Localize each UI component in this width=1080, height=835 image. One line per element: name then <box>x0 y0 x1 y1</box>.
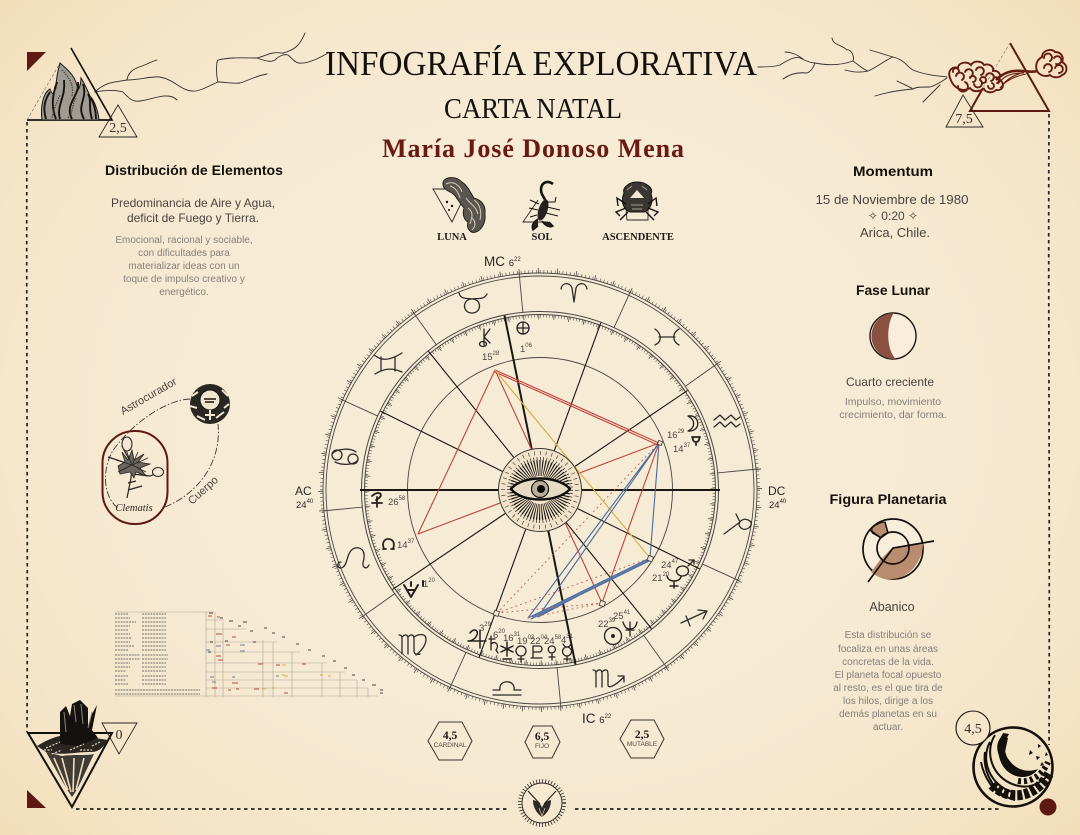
earth element icon <box>27 700 137 808</box>
neptune degree: 25 <box>613 611 624 622</box>
description: materializar ideas con un <box>128 261 240 272</box>
mars degree: 24 <box>661 560 672 571</box>
angle labels <box>295 254 787 726</box>
phase description: crecimiento, dar forma. <box>839 409 947 421</box>
mercury <box>562 644 572 661</box>
jupiter degree: 3 <box>479 623 484 634</box>
figure description: los hilos, dirige a los <box>843 696 933 707</box>
capricorn <box>724 514 751 534</box>
saturn degree: 6 <box>493 630 498 641</box>
cloud right <box>1036 50 1066 77</box>
saturn <box>489 636 498 653</box>
dc: DC <box>768 484 786 498</box>
leo <box>338 548 369 568</box>
figure description: actuar. <box>873 722 903 733</box>
mutable <box>620 720 664 758</box>
house cusps <box>360 316 720 664</box>
figure description: focaliza en unas áreas <box>838 644 938 655</box>
mc: MC 6 <box>484 254 514 269</box>
panel: figura planetaria <box>830 492 947 733</box>
mars degree: 47 <box>672 559 679 565</box>
moon degree: 16 <box>667 430 678 441</box>
panel: distribucion de elementos <box>105 163 283 298</box>
panel: fase lunar <box>839 283 947 421</box>
chiron <box>480 329 490 346</box>
vertex degree: 20 <box>428 578 436 584</box>
wheel rings and ticks <box>300 250 780 730</box>
fortune <box>517 322 529 334</box>
cardinal: CARDINAL <box>434 742 467 749</box>
subtitle: CARTA NATAL <box>444 94 622 125</box>
mercury degree: 4 <box>561 635 566 646</box>
cloud left <box>949 62 1003 92</box>
ascendente sign <box>602 182 674 243</box>
summary: deficit de Fuego y Tierra. <box>127 211 259 225</box>
fijo <box>525 726 560 758</box>
figure description: Esta distribución se <box>845 630 932 641</box>
sagittarius <box>681 610 707 626</box>
ac: AC <box>295 484 312 498</box>
heading: Fase Lunar <box>856 283 931 298</box>
clematis frame <box>102 431 168 524</box>
sol sign <box>523 182 560 243</box>
moon degree: 29 <box>678 429 685 435</box>
pluto degree: 58 <box>399 496 406 502</box>
uranus <box>692 437 700 445</box>
dc: 40 <box>780 499 787 505</box>
natal chart wheel <box>295 250 787 730</box>
jupiter degree: 29 <box>484 622 492 628</box>
cancer <box>332 449 358 464</box>
chiron degree: 15 <box>482 352 493 363</box>
pluto <box>372 493 382 507</box>
person name: María José Donoso Mena <box>382 134 684 163</box>
astrocurador diagram <box>102 376 230 524</box>
node degree: 37 <box>408 539 415 545</box>
birth data: Arica, Chile. <box>860 225 930 240</box>
mars <box>676 560 694 576</box>
sextile planet <box>667 576 681 588</box>
node <box>383 539 394 549</box>
birth data: 15 de Noviembre de 1980 <box>816 192 968 207</box>
ic: 22 <box>605 714 612 720</box>
uranus degree: 37 <box>684 443 691 449</box>
figure description: El planeta focal opuesto <box>835 670 942 681</box>
venus degree: 19 <box>517 636 528 647</box>
sign dividers <box>322 272 758 708</box>
dashed orbit <box>105 399 218 508</box>
phase description <box>839 396 947 421</box>
eye <box>511 478 570 500</box>
figure description <box>833 630 943 733</box>
label astrocurador: Astrocurador <box>118 376 179 418</box>
saturn degree: 20 <box>498 629 506 635</box>
chiron degree: 28 <box>493 351 500 357</box>
aspect table <box>115 612 383 697</box>
ic: IC 6 <box>582 711 605 726</box>
fire element icon <box>27 48 137 137</box>
pluto p <box>531 646 542 658</box>
description: con dificultades para <box>138 248 230 259</box>
description: energético. <box>159 287 209 298</box>
heading: Momentum <box>853 164 933 179</box>
mc: 22 <box>514 257 521 263</box>
figure description: al resto, es el que tira de <box>833 683 943 694</box>
ceres degree: 31 <box>514 632 521 638</box>
aspect marks <box>206 613 383 693</box>
pisces <box>655 329 679 345</box>
title: INFOGRAFÍA EXPLORATIVA <box>325 44 758 83</box>
taurus <box>459 293 487 313</box>
neptune <box>623 622 637 636</box>
ceres <box>501 642 513 659</box>
ceres degree: 16 <box>503 633 514 644</box>
icon group: luna sol ascendente <box>433 178 674 243</box>
vertex <box>404 581 423 597</box>
vertex degree: 1 <box>423 579 428 590</box>
modality hexagons <box>428 720 664 760</box>
phase name: Cuarto creciente <box>846 375 934 389</box>
fire score: 2,5 <box>109 121 127 136</box>
description: Emocional, racional y sociable, <box>115 235 253 246</box>
description: toque de impulso creativo y <box>123 274 245 285</box>
dc <box>768 484 787 511</box>
birth data: ✧ 0:20 ✧ <box>868 209 918 223</box>
fortune degree: 06 <box>525 343 533 349</box>
description <box>115 235 253 298</box>
label cuerpo: Cuerpo <box>186 474 221 507</box>
fijo: 6,5 <box>535 731 549 743</box>
mutable: 2,5 <box>635 729 649 741</box>
pluto p degree: 04 <box>541 635 548 641</box>
ascendente sign: ASCENDENTE <box>602 232 674 243</box>
fortune degree: 1 <box>520 344 525 355</box>
grid <box>115 612 378 697</box>
ac: 24 <box>296 500 307 511</box>
moon <box>688 416 698 431</box>
sextile degree: 21 <box>652 573 663 584</box>
luna sign <box>433 178 485 243</box>
proserpina <box>548 646 555 660</box>
virgo <box>399 635 426 655</box>
neptune degree: 41 <box>624 610 631 616</box>
figure description: concretas de la vida. <box>842 657 934 668</box>
sol sign: SOL <box>531 232 553 243</box>
mutable: MUTABLE <box>627 741 658 748</box>
pluto degree: 26 <box>388 497 399 508</box>
sun degree: 39 <box>609 618 616 624</box>
right cracked lines <box>758 38 947 102</box>
center eye emblem <box>498 448 582 532</box>
left cracked lines <box>95 33 328 101</box>
sextile degree: 20 <box>663 572 670 578</box>
planetary figure icon <box>863 519 934 582</box>
zodiac signs <box>332 284 751 695</box>
aries <box>561 284 587 302</box>
scorpio <box>593 670 624 687</box>
node degree: 14 <box>397 540 408 551</box>
summary: Predominancia de Aire y Agua, <box>111 196 275 210</box>
fijo: FIJO <box>535 743 549 750</box>
luna sign: LUNA <box>437 232 467 243</box>
proserpina degree: 58 <box>555 635 562 641</box>
mercury body icon <box>190 384 230 424</box>
dotted border frame <box>27 114 1049 809</box>
water element icon <box>956 711 1056 816</box>
heading: Figura Planetaria <box>830 492 947 507</box>
pluto p degree: 22 <box>530 636 541 647</box>
sun <box>604 628 622 644</box>
birth data <box>816 192 968 240</box>
figure name: Abanico <box>869 600 915 614</box>
summary <box>111 196 275 225</box>
gemini <box>374 353 402 374</box>
earth score: 0 <box>116 728 122 743</box>
air element icon <box>946 43 1066 127</box>
flower drawing: Clematis <box>115 503 153 514</box>
air score: 7,5 <box>955 112 973 127</box>
sun degree: 22 <box>598 619 609 630</box>
uranus degree: 14 <box>673 444 684 455</box>
ac: 40 <box>307 499 314 505</box>
flower drawing <box>108 437 164 514</box>
dc: 24 <box>769 500 780 511</box>
planet list <box>115 614 200 694</box>
aquarius <box>714 415 740 427</box>
figure description: demás planetas en su <box>839 709 937 720</box>
libra <box>493 682 521 695</box>
venus <box>516 646 526 662</box>
mercury degree: 31 <box>566 634 574 640</box>
planets and degrees <box>372 322 700 662</box>
moth seal logo <box>520 781 564 825</box>
cardinal: 4,5 <box>443 730 457 742</box>
venus degree: 03 <box>528 635 535 641</box>
phase description: Impulso, movimiento <box>845 396 941 408</box>
water score: 4,5 <box>964 722 982 737</box>
moon phase icon <box>870 313 916 359</box>
panel: momentum <box>816 164 968 240</box>
heading: Distribución de Elementos <box>105 163 283 178</box>
proserpina degree: 24 <box>544 636 555 647</box>
cardinal <box>428 722 472 760</box>
aspect lines <box>418 370 663 619</box>
ac <box>295 484 314 511</box>
jupiter <box>468 630 486 648</box>
